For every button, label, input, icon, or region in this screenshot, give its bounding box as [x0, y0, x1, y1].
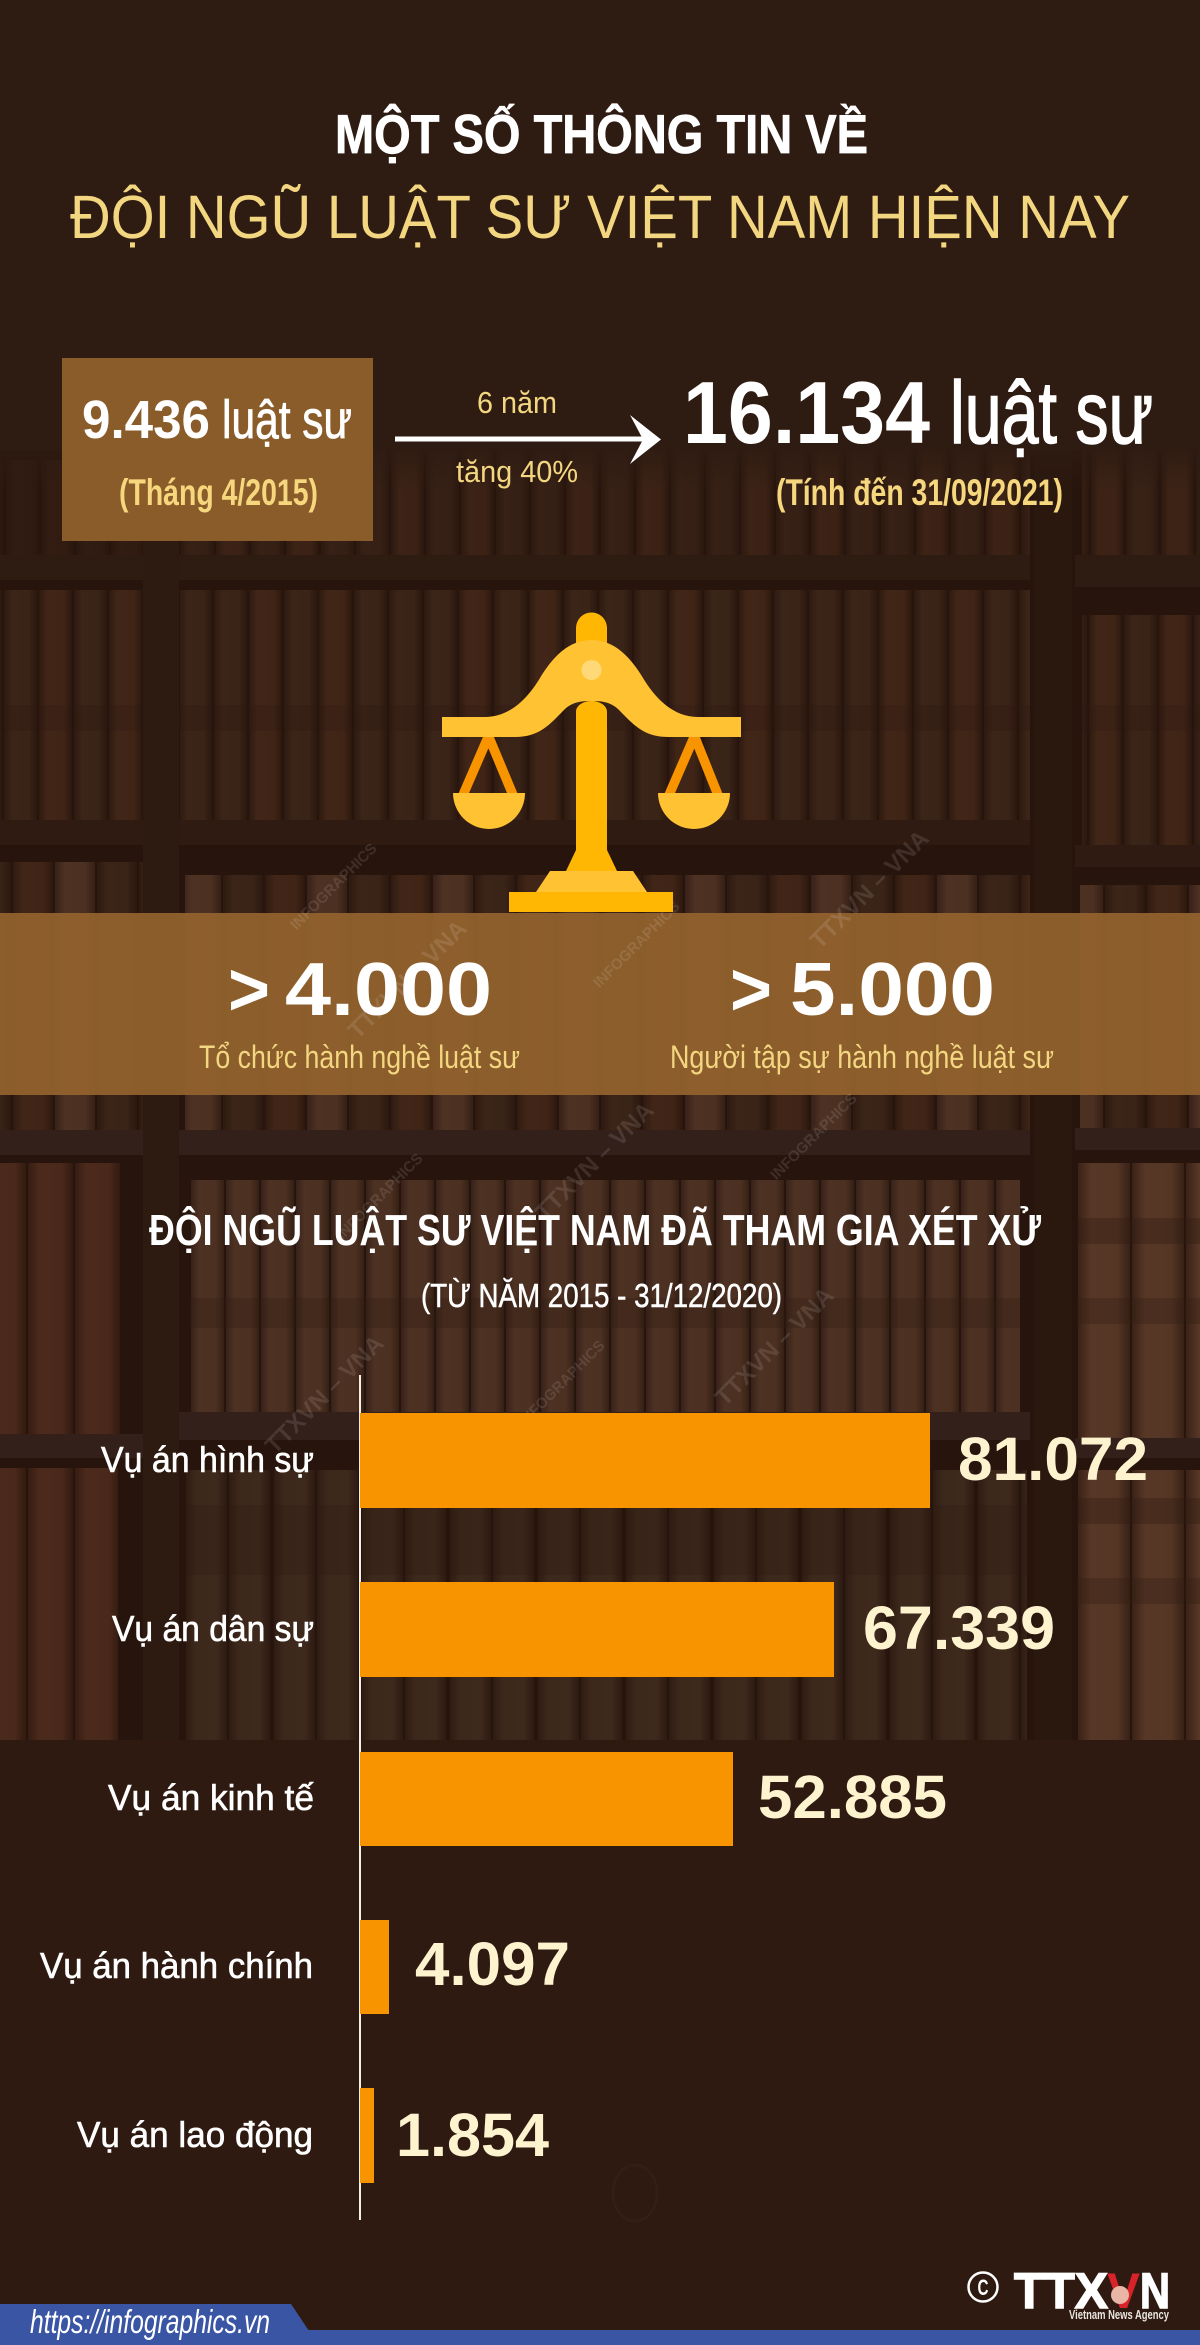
- copyright symbol: [968, 2272, 998, 2302]
- unit luật sư: luật sư: [222, 390, 352, 450]
- watermarks: TTXVN – VNA: [530, 1097, 659, 1226]
- stat: law organisations: [199, 947, 520, 1075]
- bar: economic cases: Vụ án kinh tế: [108, 1777, 314, 1818]
- number 16.134: 16.134: [683, 363, 930, 462]
- panel: 2015 lawyers count: [62, 358, 373, 541]
- bar: administrative cases: 4.097: [415, 1930, 570, 1998]
- bar: economic cases: 52.885: [758, 1763, 947, 1831]
- watermarks: INFOGRAPHICS: [515, 1337, 608, 1430]
- watermarks: TTXVN – VNA: [343, 915, 472, 1044]
- title line 2: ĐỘI NGŨ LUẬT SƯ VIỆT NAM HIỆN NAY: [70, 183, 1130, 251]
- watermarks: [260, 825, 934, 1503]
- label 6 years: 6 năm: [477, 385, 557, 420]
- watermarks: INFOGRAPHICS: [590, 898, 683, 991]
- watermarks: INFOGRAPHICS: [333, 1150, 426, 1243]
- bar: administrative cases: [40, 1920, 570, 2014]
- logo: TTXVN: [968, 2263, 1170, 2322]
- bar chart: cases: [40, 1375, 1148, 2220]
- arrow: growth: [395, 385, 661, 489]
- stat: trainee lawyers: [670, 947, 1054, 1075]
- logo: TTXVN: V: [1107, 2263, 1141, 2319]
- panel: 2021 lawyers count: [683, 363, 1153, 513]
- watermarks: INFOGRAPHICS: [767, 1090, 860, 1183]
- wordmark: TTX: [1014, 2263, 1108, 2319]
- date September 2021: (Tính đến 31/09/2021): [776, 472, 1063, 513]
- title: [70, 103, 1130, 251]
- bar: criminal cases: [101, 1413, 1148, 1508]
- watermarks: TTXVN – VNA: [260, 1330, 389, 1459]
- bar: civil cases: Vụ án dân sự: [112, 1608, 314, 1649]
- url: https://infographics.vn: [30, 2303, 270, 2340]
- bar: criminal cases: 81.072: [958, 1425, 1148, 1493]
- date April 2015: (Tháng 4/2015): [119, 472, 318, 513]
- globe: [1111, 2286, 1129, 2304]
- number 9.436: 9.436: [82, 390, 210, 450]
- heading: trial participation: [149, 1204, 1041, 1314]
- bar: civil cases: [112, 1582, 1055, 1677]
- watermarks: INFOGRAPHICS: [830, 1410, 923, 1503]
- bar: labour cases: 1.854: [396, 2101, 549, 2169]
- watermarks: INFOGRAPHICS: [287, 840, 380, 933]
- caption: Tổ chức hành nghề luật sư: [199, 1039, 520, 1075]
- value >4.000: >: [228, 947, 270, 1031]
- bar: economic cases: [108, 1752, 947, 1846]
- bar: civil cases: 67.339: [863, 1594, 1055, 1662]
- stat: law organisations: 4.000: [285, 947, 492, 1031]
- footer band with url: [0, 2303, 1200, 2345]
- bar: criminal cases: Vụ án hình sự: [101, 1439, 314, 1480]
- watermarks: TTXVN – VNA: [710, 1282, 839, 1411]
- bar: labour cases: Vụ án lao động: [77, 2114, 313, 2155]
- band: stats background: [0, 913, 1200, 1095]
- label increase 40%: tăng 40%: [456, 454, 578, 489]
- title line 1: MỘT SỐ THÔNG TIN VỀ: [335, 103, 868, 165]
- watermarks: TTXVN – VNA: [805, 825, 934, 954]
- sub heading period: (TỪ NĂM 2015 - 31/12/2020): [421, 1277, 782, 1314]
- caption: Người tập sự hành nghề luật sư: [670, 1039, 1054, 1075]
- value >5.000: >: [730, 947, 772, 1031]
- copyright symbol: C: [978, 2275, 989, 2300]
- bar: labour cases: [77, 2088, 549, 2183]
- bar: administrative cases: Vụ án hành chính: [40, 1945, 313, 1986]
- stat: trainee lawyers: 5.000: [790, 947, 995, 1031]
- logo: TTXVN: N: [1140, 2263, 1170, 2319]
- icon: scales of justice: [442, 612, 741, 912]
